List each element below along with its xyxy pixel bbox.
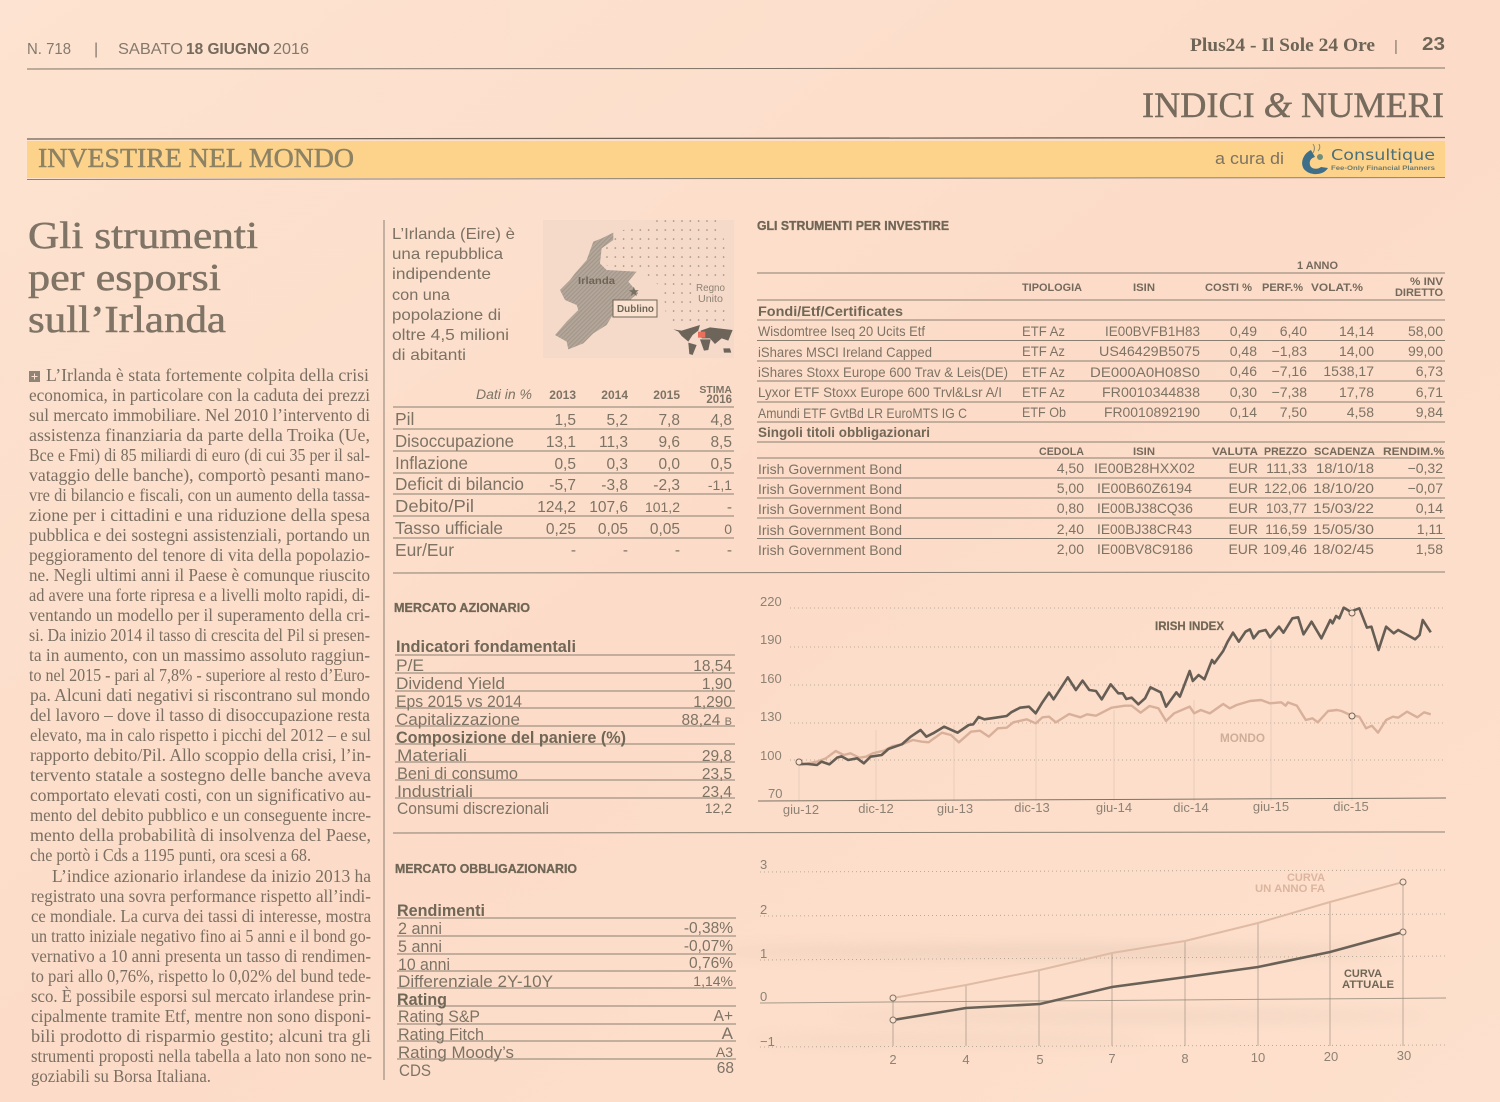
table: investment instruments: EUR — [1228, 480, 1258, 496]
text block: Ireland facts: una repubblica — [392, 246, 503, 263]
banner: investire nel mondo: a cura di — [1215, 149, 1284, 168]
x axis labels: 4 — [962, 1052, 970, 1067]
table: investment instruments: EUR — [1228, 460, 1258, 476]
table: investment instruments: 6,71 — [1416, 384, 1443, 400]
table: investment instruments: 6,40 — [1280, 323, 1307, 339]
masthead: publication and page number — [1190, 34, 1445, 56]
table: investment instruments: Fondi/Etf/Certificates — [758, 303, 903, 319]
table: macro data: - — [727, 499, 732, 516]
icon: plus bullet — [29, 371, 40, 382]
y axis labels: 0 — [760, 989, 767, 1004]
table: investment instruments: 18/02/45 — [1313, 541, 1374, 557]
table: investment instruments: Irish Government Bond — [758, 481, 902, 497]
table header: bonds: RENDIM.% — [1383, 446, 1444, 458]
table: bond market: Differenziale 2Y-10Y — [398, 972, 553, 991]
table: investment instruments: 116,59 — [1265, 521, 1307, 537]
text block: Ireland facts: L’Irlanda (Eire) è — [392, 226, 515, 243]
table: investment instruments: IE00BVFB1H83 — [1105, 323, 1200, 339]
table: equity market: 12,2 — [705, 800, 732, 816]
table: equity market: 23,4 — [702, 784, 732, 801]
table: investment instruments — [757, 260, 1445, 558]
table: equity market: 18,54 — [693, 658, 732, 675]
table: bond market: CDS — [399, 1061, 431, 1080]
article body text: L’Irlanda è stata fortemente colpita della crisi — [46, 365, 369, 385]
map: Ireland with Dublin and world locator: Irlanda — [578, 275, 615, 287]
table: macro data: -1,1 — [708, 477, 732, 493]
x axis labels: giu-13 — [937, 801, 973, 816]
table: macro data: 0,05 — [650, 521, 680, 538]
table: investment instruments: ETF Az — [1022, 343, 1065, 359]
table: macro data: -2,3 — [653, 477, 680, 494]
series: Mondo — [799, 700, 1431, 765]
table: equity market — [395, 637, 735, 818]
table: macro data: 9,6 — [658, 434, 680, 451]
table: investment instruments: iShares MSCI Ireland Capped — [758, 344, 932, 360]
x axis labels: 30 — [1397, 1048, 1411, 1063]
article body text: un tratto iniziale negativo fino ai 5 anni e il bond go- — [31, 926, 371, 946]
table: macro data: Deficit di bilancio — [395, 474, 524, 494]
x axis labels: 20 — [1324, 1049, 1338, 1064]
x axis labels: dic-14 — [1173, 800, 1209, 815]
article body text: del lavoro – dove il tasso di disoccupazione resta — [30, 705, 370, 725]
table header: bonds: VALUTA — [1212, 446, 1258, 458]
table: investment instruments: ETF Az — [1022, 384, 1065, 400]
x axis labels: giu-15 — [1253, 799, 1289, 814]
map: Ireland with Dublin and world locator — [543, 218, 734, 358]
table: investment instruments: 0,48 — [1230, 343, 1257, 359]
map: Ireland with Dublin and world locator: Dublino — [617, 303, 654, 315]
table: investment instruments: 0,49 — [1230, 323, 1257, 339]
table header: funds: DIRETTO — [1395, 287, 1443, 299]
y axis labels: 2 — [760, 902, 767, 917]
table: investment instruments: 2,00 — [1057, 541, 1084, 557]
table: macro data: 0,05 — [598, 521, 628, 538]
table header: years — [476, 384, 732, 406]
table: bond market — [397, 901, 736, 1080]
article body text: L’indice azionario irlandese da inizio 2013 ha — [52, 866, 371, 886]
table: investment instruments: IE00BJ38CQ36 — [1097, 500, 1193, 516]
article headline — [28, 215, 258, 341]
article body text: ce mondiale. La curva dei tassi di interesse, mostra — [31, 906, 371, 926]
map: world locator — [673, 325, 733, 355]
table header: years: Dati in % — [476, 386, 532, 402]
drop lines — [893, 882, 1403, 1046]
table: investment instruments: IE00B60Z6194 — [1097, 480, 1192, 496]
map: Ireland with Dublin and world locator: Unito — [698, 294, 723, 305]
curve label: attuale: ATTUALE — [1342, 979, 1394, 991]
heading: gli strumenti per investire: GLI STRUMENTI PER INVESTIRE — [757, 219, 949, 233]
table: bond market: 0,76% — [689, 955, 733, 972]
table: investment instruments: EUR — [1228, 541, 1258, 557]
table: investment instruments: 1,11 — [1417, 521, 1443, 537]
table: investment instruments: 6,73 — [1416, 363, 1443, 379]
article body text: economica, in particolare con la caduta dei prezzi — [29, 385, 370, 405]
article body text: mento della probabilità di insolvenza del Paese, — [30, 825, 371, 845]
table: investment instruments: 0,14 — [1416, 500, 1443, 516]
table: bond market: -0,07% — [684, 938, 733, 955]
table: macro data: 5,2 — [606, 412, 628, 429]
article body text: elevato, ma in calo rispetto i picchi del 2012 – e sul — [30, 725, 371, 745]
table: investment instruments: 9,84 — [1416, 404, 1443, 420]
table: macro data: 0,25 — [546, 521, 576, 538]
table: investment instruments: 17,78 — [1339, 384, 1374, 400]
article body text: ne. Negli ultimi anni il Paese è comunque riuscito — [29, 565, 370, 585]
icon: Consultique logo: Consultique — [1331, 146, 1435, 164]
table: investment instruments: Irish Government Bond — [758, 461, 902, 477]
table header: bonds: SCADENZA — [1314, 446, 1375, 458]
table: macro data: 101,2 — [645, 499, 680, 515]
article body text: assistenza finanziaria da parte della Troika (Ue, — [29, 425, 370, 445]
text block: Ireland facts: di abitanti — [392, 347, 466, 364]
table: bond market: A3 — [716, 1044, 733, 1060]
table: equity market: P/E — [396, 656, 424, 675]
article body text: sul mercato immobiliare. Nel 2010 l’intervento di — [29, 405, 370, 425]
table: investment instruments: 99,00 — [1408, 343, 1443, 359]
table: equity market: 88,24 B — [682, 712, 732, 729]
article body text: to pari allo 0,76%, rispetto lo 0,02% del bund tede- — [31, 966, 371, 986]
table: investment instruments: IE00BV8C9186 — [1097, 541, 1193, 557]
table: macro data: -3,8 — [601, 477, 628, 494]
table: equity market: Capitalizzazione — [396, 710, 520, 729]
table header: years: 2014 — [601, 388, 628, 402]
article body text: strumenti proposti nella tabella a lato non sono ne- — [31, 1046, 372, 1066]
x axis labels: 10 — [1251, 1050, 1265, 1065]
table: investment instruments: Wisdomtree Iseq 20 Ucits Etf — [758, 323, 925, 339]
article body text: Bce e Fmi) di 85 miliardi di euro (di cui 35 per il sal- — [29, 445, 370, 465]
article body text: zione per i cittadini e una riduzione della spesa — [29, 505, 370, 525]
y axis labels: 190 — [760, 632, 782, 647]
table: equity market: 29,8 — [702, 748, 732, 765]
table header: years: 2015 — [653, 388, 680, 402]
curve label: attuale — [1342, 968, 1394, 991]
map: Ireland with Dublin and world locator: ★ — [628, 284, 640, 299]
curve: one year ago — [893, 882, 1403, 998]
table: investment instruments: −0,32 — [1408, 460, 1443, 476]
y axis labels: 70 — [768, 786, 782, 801]
y axis labels: 1 — [760, 946, 767, 961]
article body text: bili prodotto di risparmio gestito; alcuni tra gli — [31, 1026, 371, 1046]
curve: current — [893, 932, 1403, 1020]
table: bond market: 1,14% — [693, 973, 733, 989]
table: equity market: 1,90 — [702, 676, 732, 693]
curve label: attuale: CURVA — [1344, 968, 1382, 980]
text block: Ireland facts: con una — [392, 287, 450, 304]
table: investment instruments: 15/05/30 — [1313, 521, 1374, 537]
table: macro data: Pil — [395, 409, 414, 429]
table header: bonds: PREZZO — [1264, 446, 1307, 458]
table: equity market: Composizione del paniere (%) — [396, 728, 626, 747]
table: investment instruments: 14,00 — [1339, 343, 1374, 359]
table: macro data: 0,3 — [606, 456, 628, 473]
table: investment instruments: Amundi ETF GvtBd LR EuroMTS IG C — [758, 405, 967, 421]
article body text: si. Da inizio 2014 il tasso di crescita del Pil si presen- — [29, 625, 370, 645]
table header: funds: % INV — [1410, 276, 1444, 288]
table: macro data: Disoccupazione — [395, 431, 514, 451]
article body text: cipalmente tramite Etf, mentre non sono disponi- — [31, 1006, 371, 1026]
table: macro data: Eur/Eur — [395, 540, 454, 560]
table: investment instruments: −7,16 — [1272, 363, 1307, 379]
section title: Indici & Numeri: INDICI & NUMERI — [1142, 85, 1444, 125]
article headline: per esporsi — [28, 257, 221, 299]
article body text: registrato una sovra performance rispetto all’indi- — [31, 886, 371, 906]
table: macro data: 107,6 — [589, 499, 628, 516]
table header: bonds: CEDOLA — [1039, 446, 1084, 458]
y axis labels: 220 — [760, 594, 782, 609]
table: macro data: - — [571, 542, 576, 559]
table: bond market: Rating Moody’s — [398, 1043, 514, 1062]
x axis labels: 2 — [889, 1052, 897, 1067]
y axis labels: −1 — [760, 1034, 775, 1049]
article headline: sull’Irlanda — [28, 299, 226, 341]
table header: years: 2016 — [706, 394, 732, 406]
article body text: comportato elevati costi, con un significativo au- — [30, 785, 371, 805]
table: investment instruments: DE000A0H08S0 — [1090, 364, 1200, 380]
table: bond market: Rating S&P — [398, 1007, 480, 1026]
table: macro data: Debito/Pil — [395, 496, 474, 516]
table: investment instruments: US46429B5075 — [1099, 343, 1200, 359]
curve label: un anno fa: CURVA — [1287, 872, 1325, 884]
article body text: ventando un modello per il superamento della cri- — [29, 605, 370, 625]
table: investment instruments: 4,50 — [1057, 460, 1084, 476]
table: macro data: 8,5 — [710, 434, 732, 451]
table: macro data: 13,1 — [546, 434, 576, 451]
article headline: Gli strumenti — [28, 215, 258, 257]
table header: years: 2013 — [549, 388, 576, 402]
table: investment instruments: 1538,17 — [1323, 363, 1374, 379]
table: investment instruments: iShares Stoxx Europe 600 Trav & Leis(DE) — [758, 364, 1008, 380]
table: investment instruments: Irish Government Bond — [758, 522, 902, 538]
table: bond market: Rendimenti — [397, 901, 485, 920]
table: investment instruments: 18/10/20 — [1313, 480, 1374, 496]
table: equity market: Dividend Yield — [396, 674, 505, 693]
table: investment instruments: 111,33 — [1266, 460, 1307, 476]
text block: Ireland facts: indipendente — [392, 266, 491, 283]
table: macro data: 1,5 — [554, 412, 576, 429]
table: macro data: 0 — [724, 521, 732, 537]
table: investment instruments: 0,46 — [1230, 363, 1257, 379]
table: macro data: - — [623, 542, 628, 559]
table: bond market: 2 anni — [398, 919, 442, 938]
line chart: Irish index vs world — [758, 594, 1446, 817]
table: investment instruments: 109,46 — [1263, 541, 1307, 557]
article body text: mento del debito pubblico e un conseguente incre- — [30, 805, 371, 825]
x axis labels: dic-12 — [858, 801, 894, 816]
masthead: issue and date: | — [94, 41, 98, 58]
masthead: issue and date: 18 GIUGNO — [186, 41, 270, 58]
table header: funds: 1 ANNO — [1297, 260, 1338, 272]
table: investment instruments: 15/03/22 — [1313, 500, 1374, 516]
masthead: issue and date: SABATO — [118, 41, 183, 58]
series: Irish index — [799, 608, 1431, 765]
table: bond market: -0,38% — [684, 920, 733, 937]
table: macro data: -5,7 — [549, 477, 576, 494]
curve label: un anno fa: UN ANNO FA — [1255, 883, 1325, 895]
table: investment instruments: Irish Government Bond — [758, 501, 902, 517]
table: investment instruments: −0,07 — [1408, 480, 1443, 496]
table: equity market: Industriali — [397, 782, 473, 801]
table: investment instruments: 0,30 — [1230, 384, 1257, 400]
table: investment instruments: −7,38 — [1272, 384, 1307, 400]
table: bond market: A+ — [714, 1008, 733, 1025]
table: equity market: Materiali — [397, 746, 467, 765]
table: investment instruments: 0,80 — [1057, 500, 1084, 516]
article body text: vre di bilancio e fiscali, con un aumento della tassa- — [29, 485, 370, 505]
article body text: to nel 2015 - pari al 7,8% - superiore al resto d’Euro- — [29, 665, 370, 685]
table: investment instruments: ETF Ob — [1022, 404, 1066, 420]
table: investment instruments: IE00BJ38CR43 — [1097, 521, 1192, 537]
table: equity market: 1,290 — [693, 694, 732, 711]
x axis labels: 8 — [1181, 1051, 1189, 1066]
table: macro data: - — [727, 542, 732, 559]
table: equity market: Indicatori fondamentali — [396, 637, 576, 656]
table: investment instruments: FR0010892190 — [1104, 404, 1200, 420]
table: investment instruments: 4,58 — [1347, 404, 1374, 420]
x axis labels: dic-15 — [1333, 799, 1369, 814]
x axis labels: dic-13 — [1014, 800, 1050, 815]
table: investment instruments: 1,58 — [1416, 541, 1443, 557]
article body text: sco. È possibile esporsi sul mercato irlandese prin- — [31, 986, 371, 1006]
table: investment instruments: 5,00 — [1057, 480, 1084, 496]
table header: years: STIMA — [699, 384, 732, 396]
table header: bonds: ISIN — [1133, 446, 1155, 458]
x axis labels: 7 — [1108, 1051, 1116, 1066]
masthead: issue and date: N. 718 — [27, 41, 71, 58]
map: United Kingdom dotted area — [603, 218, 730, 323]
article body text: che portò i Cds a 1195 punti, ora scesi a 68. — [30, 845, 311, 865]
table: investment instruments: ETF Az — [1022, 323, 1065, 339]
table: investment instruments: FR0010344838 — [1102, 384, 1200, 400]
table: investment instruments: EUR — [1228, 500, 1258, 516]
table header: funds: COSTI % — [1205, 282, 1252, 294]
x axis labels — [889, 1048, 1411, 1067]
table: bond market: A — [722, 1024, 734, 1043]
masthead: issue and date: 2016 — [273, 41, 309, 58]
table header: funds: PERF.% — [1262, 282, 1303, 294]
table: investment instruments: 122,06 — [1264, 480, 1307, 496]
table: macro data: 4,8 — [710, 412, 732, 429]
article body text: vernativo a 10 anni presenta un tasso di rendimen- — [31, 946, 371, 966]
table: investment instruments: 58,00 — [1408, 323, 1443, 339]
table: investment instruments: ETF Az — [1022, 364, 1065, 380]
table: investment instruments: Singoli titoli obbligazionari — [758, 424, 930, 440]
table: macro data: - — [675, 542, 680, 559]
article body text — [29, 365, 372, 1086]
table: investment instruments: 2,40 — [1057, 521, 1084, 537]
article body text: tervento statale a sostegno delle banche aveva — [30, 765, 371, 785]
table: macro data: 0,5 — [710, 456, 732, 473]
table: investment instruments: Lyxor ETF Stoxx Europe 600 Trvl&Lsr A/I — [758, 384, 1002, 400]
table: investment instruments: −1,83 — [1272, 343, 1307, 359]
masthead: publication and page number: | — [1394, 38, 1398, 55]
table: investment instruments: 7,50 — [1280, 404, 1307, 420]
x axis labels: giu-14 — [1096, 800, 1132, 815]
table: investment instruments: 0,14 — [1230, 404, 1257, 420]
x axis labels — [783, 799, 1369, 817]
text block: Ireland facts: popolazione di — [392, 307, 501, 324]
table: macro data: 0,5 — [554, 456, 576, 473]
table: investment instruments: 18/10/18 — [1316, 460, 1374, 476]
table: macro data: 7,8 — [658, 412, 680, 429]
map: Ireland shape — [555, 233, 638, 349]
y axis labels — [760, 857, 775, 1049]
table: macro data: Inflazione — [395, 453, 468, 473]
table: investment instruments: Irish Government Bond — [758, 542, 902, 558]
table: bond market: 5 anni — [398, 937, 442, 956]
table: bond market: Rating Fitch — [398, 1025, 484, 1044]
article body text: ta in aumento, con un massimo assoluto raggiun- — [29, 645, 370, 665]
masthead: issue and date — [27, 41, 309, 58]
article body text: vataggio delle banche), comportò pesanti mano- — [29, 465, 370, 485]
line chart: yield curve — [760, 857, 1446, 1067]
table header: funds: TIPOLOGIA — [1022, 282, 1082, 294]
y axis labels — [760, 594, 782, 801]
series label: Mondo: MONDO — [1220, 733, 1265, 745]
map: Ireland with Dublin and world locator: Regno — [696, 283, 725, 294]
table: investment instruments: IE00B28HXX02 — [1094, 460, 1195, 476]
table: macro data: Tasso ufficiale — [395, 518, 503, 538]
table header: bonds — [1039, 446, 1444, 458]
x axis labels: 5 — [1036, 1052, 1044, 1067]
icon: Consultique logo — [1302, 144, 1436, 174]
text block: Ireland facts — [392, 226, 515, 364]
table: investment instruments: 14,14 — [1339, 323, 1374, 339]
y axis labels: 3 — [760, 857, 767, 872]
curve label: un anno fa — [1255, 872, 1325, 895]
article body text: ad avere una forte ripresa e a livelli molto rapidi, di- — [29, 585, 370, 605]
table: bond market: 10 anni — [398, 955, 450, 974]
heading: mercato obbligazionario: MERCATO OBBLIGAZIONARIO — [395, 862, 577, 876]
article body text: peggioramento del tenore di vita della popolazio- — [29, 545, 370, 565]
masthead: publication and page number: Plus24 - Il Sole 24 Ore — [1190, 35, 1375, 56]
table: macro data: 11,3 — [599, 434, 628, 451]
y axis labels: 130 — [760, 709, 782, 724]
article body text: rapporto debito/Pil. Allo scoppio della crisi, l’in- — [30, 745, 371, 765]
table: equity market: Consumi discrezionali — [397, 799, 549, 818]
table header: funds: VOLAT.% — [1311, 282, 1363, 294]
table: investment instruments: 103,77 — [1266, 500, 1307, 516]
table: macro data: 0,0 — [658, 456, 680, 473]
table: investment instruments: EUR — [1228, 521, 1258, 537]
banner: investire nel mondo: INVESTIRE NEL MONDO — [38, 143, 354, 173]
table: equity market: Beni di consumo — [397, 764, 518, 783]
x axis labels: giu-12 — [783, 802, 819, 817]
series label: Irish index: IRISH INDEX — [1155, 621, 1224, 633]
table: equity market: Eps 2015 vs 2014 — [396, 692, 522, 711]
text block: Ireland facts: oltre 4,5 milioni — [392, 327, 509, 344]
heading: mercato azionario: MERCATO AZIONARIO — [394, 601, 530, 615]
table header: funds: ISIN — [1133, 282, 1155, 294]
table: bond market: 68 — [717, 1060, 734, 1077]
table: macro data — [393, 384, 734, 560]
banner: investire nel mondo — [27, 141, 1445, 178]
table header: funds — [1022, 260, 1444, 299]
y axis labels: 100 — [760, 748, 782, 763]
masthead: publication and page number: 23 — [1422, 34, 1445, 54]
table: bond market: Rating — [397, 990, 447, 1009]
article body text: pubblica e dei sostegni assistenziali, portando un — [29, 525, 370, 545]
article body text: pa. Alcuni dati negativi si riscontrano sul mondo — [30, 685, 370, 705]
icon: Consultique logo: Fee-Only Financial Planners — [1331, 166, 1436, 172]
y axis labels: 160 — [760, 671, 782, 686]
table: equity market: 23,5 — [702, 766, 732, 783]
table: macro data: 124,2 — [537, 499, 576, 516]
article body text: goziabili su Borsa Italiana. — [31, 1066, 211, 1086]
